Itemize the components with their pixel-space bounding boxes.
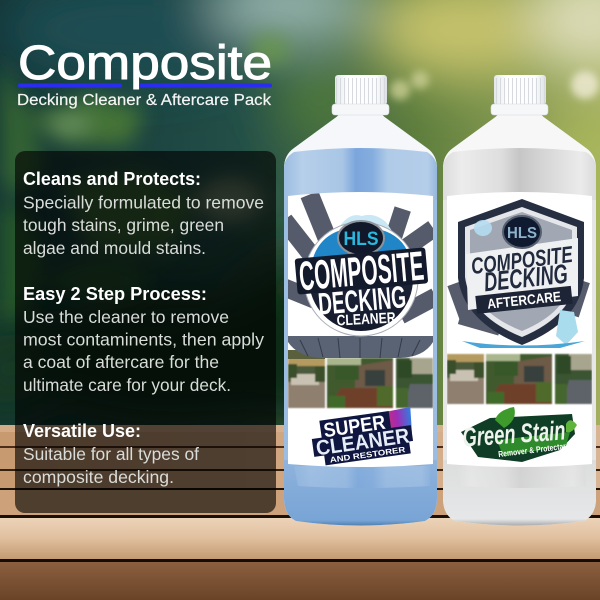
translucent text panel [15,151,276,513]
deck planks [288,193,433,324]
COMPOSITE wordmark [294,248,428,294]
text block: easy 2 step process [23,284,264,395]
bottle 2 label [447,192,592,467]
HLS badge [338,221,384,255]
deck roof [288,336,433,358]
HLS badge [503,216,541,248]
text block: versatile use: Versatile Use: [23,421,141,441]
bottle: composite decking cleaner [277,75,440,526]
HLS badge: HLS [344,229,378,250]
bottle 1 liquid lower [284,200,437,460]
HLS badge: HLS [507,225,537,242]
COMPOSITE wordmark: COMPOSITE [297,243,426,299]
bottle 2 sides [443,200,596,460]
text block: versatile use: Suitable for all types of [23,444,199,464]
bottle 1 cap [335,75,387,105]
blue swoosh [462,341,585,348]
AFTERCARE ribbon: AFTERCARE [486,288,562,312]
ice cube [556,310,578,345]
bottle 2 cap collar [491,104,548,115]
planks [447,279,590,336]
roundel [304,222,418,336]
bottle 2 body [443,114,596,526]
label 2 artwork [447,199,592,462]
DECKING wordmark: DECKING [317,279,407,322]
text block: versatile use: composite decking. [23,467,174,487]
text block: cleans and protects: tough stains, grime, green [23,215,224,235]
title: Composite [18,37,272,90]
text block: cleans and protects: Specially formulated to remove [23,192,264,212]
shield [458,199,584,345]
text block: easy 2 step process: ultimate care for your deck. [23,375,231,395]
water splash [340,214,392,230]
wooden deck [0,425,600,600]
text block: easy 2 step process: most contaminents, then apply [23,330,264,350]
bottle 2 cap [494,75,546,105]
subtitle: Decking Cleaner & Aftercare Pack [17,92,271,109]
garden photos [288,350,433,408]
bottle 1 liquid band [284,148,437,200]
bottle 2 base [443,460,596,526]
garden photos [447,354,592,404]
bottle 1 cap collar [332,104,389,115]
Super Cleaner logo [309,407,417,467]
bottle: composite decking aftercare [443,75,596,526]
text block: cleans and protects: algae and mould stains. [23,238,206,258]
text block: cleans and protects: Cleans and Protects: [23,169,201,189]
bottle 1 liquid base [284,460,437,526]
background: blurred garden foliage [0,0,600,430]
Super Cleaner logo: AND RESTORER [329,445,406,465]
Super Cleaner logo: SUPER [322,412,387,442]
text block: cleans and protects [23,169,264,258]
Green Stain logo [461,407,577,462]
Super Cleaner logo: CLEANER [315,425,411,460]
CLEANER wordmark: CLEANER [336,309,396,330]
bottle 1 body [284,114,437,526]
Green Stain logo: Remover & Protectar [498,441,567,459]
label 1 artwork [288,193,433,466]
text block: versatile use [23,421,199,487]
white banner [466,238,578,310]
text block: easy 2 step process: a coat of aftercare for the [23,352,219,372]
text block: easy 2 step process: Easy 2 Step Process: [23,284,207,304]
bottle 1 base highlight [294,466,430,488]
bottle 1 label [288,192,433,467]
text block: easy 2 step process: Use the cleaner to remove [23,307,229,327]
bottle 2 base highlight [455,466,586,488]
water droplet [474,220,492,236]
water wave [313,230,406,258]
bottle 2 grey band [443,148,596,200]
